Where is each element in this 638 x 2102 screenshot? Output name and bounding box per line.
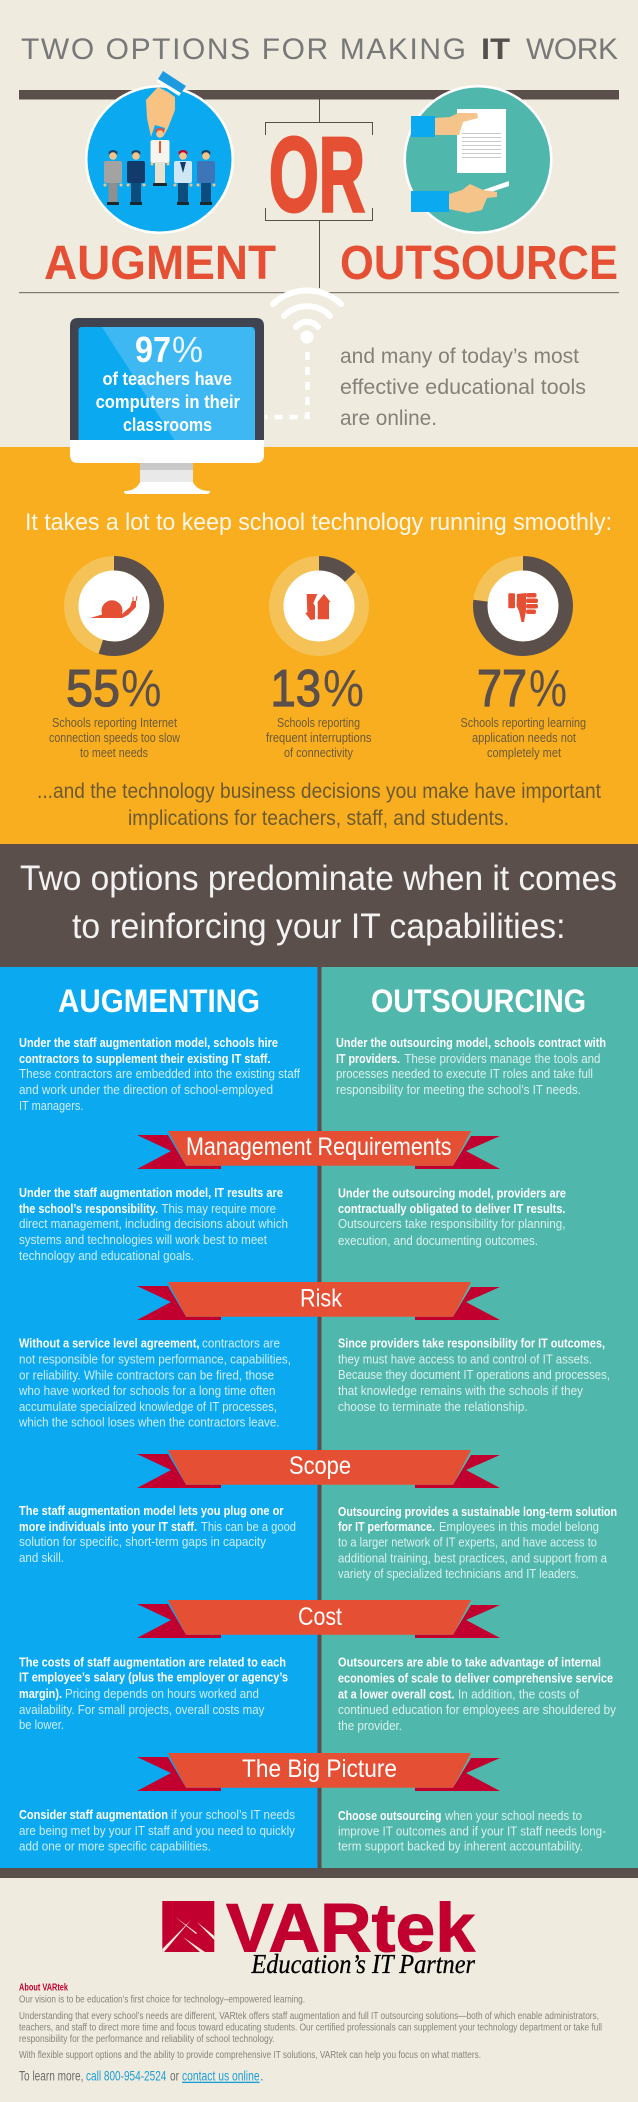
icon: broken arrows (305, 594, 331, 620)
text: augmenting risk: contractors are (202, 1336, 280, 1351)
text: effective tools online: and many of today’s most (340, 345, 579, 368)
banner: Scope (137, 1450, 500, 1488)
text: outsourcing model: responsibility for meeting the school’s IT needs. (336, 1082, 581, 1097)
icon: wifi signal with dashed connector (265, 290, 341, 417)
stat: 55% (66, 660, 162, 718)
text: business decisions implications (37, 779, 601, 830)
text: outsourcing management: contractually obligated to deliver IT results. (338, 1201, 566, 1216)
stat: 97% (135, 329, 203, 370)
stat: 13%: 13 (270, 660, 321, 718)
text: call to action: or (170, 2069, 179, 2084)
caption: learning applications: completely met (487, 746, 561, 760)
text: outsourcing model: IT providers. (336, 1051, 400, 1066)
banner: Scope: Scope (289, 1452, 351, 1480)
icon: hand picking a person (146, 71, 186, 137)
text: augmenting risk: which the school loses when the contractors leave. (18, 1415, 280, 1430)
text: outsourcing risk: they must have access to and control of IT assets. (338, 1352, 592, 1367)
text: outsourcing management: Under the outsourcing model, providers are (338, 1186, 566, 1200)
text: augmenting big picture: add one or more specific capabilities. (19, 1839, 211, 1854)
text: outsourcing cost: the provider. (338, 1718, 402, 1733)
icon: hand holding pen (411, 181, 509, 213)
text: business decisions implications: implications for teachers, staff, and students. (128, 806, 509, 830)
icon: hand holding document (411, 113, 478, 137)
caption: interruptions: frequent interruptions (266, 731, 372, 745)
text: outsourcing cost (338, 1655, 616, 1733)
text: augmenting big picture: Consider staff augmentation (19, 1807, 168, 1822)
caption: learning applications: application needs not (472, 731, 576, 745)
heading band: two options predominate: to reinforcing your IT capabilities: (72, 907, 566, 946)
text: outsourcing cost: at a lower overall cost. (338, 1686, 454, 1701)
text: augmenting scope (19, 1503, 296, 1565)
banner: The Big Picture (137, 1753, 500, 1791)
text: augmenting management: systems and technologies will work best to meet (19, 1232, 267, 1247)
text: outsourcing scope: additional training, best practices, and support from a (338, 1551, 608, 1566)
text: augmenting risk: or reliability. While contractors can be fired, those (19, 1368, 274, 1383)
text: outsourcing big picture (338, 1808, 606, 1854)
text: effective tools online: effective educational tools (340, 376, 586, 399)
text: outsourcing risk: choose to terminate the relationship. (338, 1399, 528, 1414)
heading: keep school technology running: It takes a lot to keep school technology running smoothly: (25, 509, 612, 536)
banner: Cost (137, 1600, 500, 1638)
text: outsourcing big picture: improve IT outcomes and if your IT staff needs long- (338, 1824, 606, 1839)
text: call to action: . (260, 2069, 264, 2084)
text: augmenting cost (19, 1655, 288, 1732)
logo: VARtek (162, 1890, 476, 1979)
text: augmenting risk: not responsible for system performance, capabilities, (19, 1352, 291, 1367)
banner: Risk: Risk (300, 1285, 342, 1313)
text: effective tools online (340, 345, 586, 430)
text: augmenting cost: Pricing depends on hours worked and (65, 1686, 259, 1701)
text: augmenting model: and work under the direction of school-employed (19, 1082, 273, 1097)
text: augmenting cost: The costs of staff augmentation are related to each (19, 1655, 286, 1670)
stat: 97%: 97 (135, 329, 171, 370)
text: outsourcing risk: that knowledge remains with the schools if they (338, 1383, 583, 1398)
text: outsourcing big picture: Choose outsourcing (338, 1808, 441, 1823)
text: augmenting management: Under the staff augmentation model, IT results are (19, 1185, 283, 1200)
text: augmenting risk: who have worked for schools for a long time often (18, 1383, 275, 1398)
caption: internet speeds: connection speeds too slow (49, 731, 181, 745)
text: augmenting cost: availability. For small projects, overall costs may (19, 1702, 265, 1717)
text: teachers have computers: computers in their (96, 392, 240, 412)
donut: 55 percent (71, 563, 157, 649)
icon: computer monitor with statistic (70, 318, 264, 494)
text: teachers have computers: of teachers have (102, 369, 232, 389)
text: augmenting scope: The staff augmentation model lets you plug one or (19, 1503, 284, 1518)
heading: OUTSOURCE: OUTSOURCE (340, 237, 618, 290)
text: augmenting model: contractors to supplement their existing IT staff. (19, 1051, 270, 1066)
text: teachers have computers: classrooms (123, 415, 212, 435)
text: augmenting model: These contractors are embedded into the existing staff (19, 1066, 300, 1081)
stat: 55%: % (121, 660, 162, 718)
text: effective tools online: are online. (340, 407, 437, 430)
text: call to action: call 800-954-2524 (86, 2069, 167, 2084)
text: outsourcing risk (338, 1336, 610, 1414)
text block: about VARtek: About VARtek (19, 1983, 68, 1994)
heading band: two options predominate (0, 844, 638, 967)
text block: about VARtek: Our vision is to be education’s first choice for technology–empowered learning. (19, 1995, 305, 2006)
text: outsourcing model: processes needed to execute IT roles and take full (336, 1066, 593, 1081)
panel: augmenting column background (0, 967, 318, 1868)
OR with bracket (266, 116, 372, 234)
text: augmenting management: This may require more (162, 1201, 276, 1216)
donut: 77 percent (480, 563, 566, 649)
text: outsourcing management (338, 1186, 566, 1248)
text: outsourcing scope: to a larger network of IT experts, and have access to (338, 1535, 597, 1550)
text: augmenting scope: more individuals into your IT staff. (19, 1519, 197, 1534)
title: WORK (526, 33, 618, 66)
icon: navy suited person (126, 150, 146, 205)
text: outsourcing model (336, 1035, 606, 1097)
text: outsourcing scope: variety of specialized technicians and IT leaders. (338, 1566, 579, 1581)
text: augmenting cost: be lower. (19, 1717, 64, 1732)
banner: Cost: Cost (298, 1603, 342, 1631)
caption: learning applications (460, 716, 586, 760)
text: outsourcing scope: for IT performance. (338, 1519, 435, 1534)
heading: AUGMENTING: AUGMENTING (58, 983, 260, 1019)
text: outsourcing scope (338, 1504, 617, 1581)
banner: Management Requirements (137, 1131, 500, 1169)
text: augmenting risk: Without a service level agreement, (19, 1336, 200, 1351)
stat: 13% (270, 660, 364, 718)
stat: 77%: % (529, 660, 567, 718)
text block: about VARtek: responsibility for the performance and reliability of school technology. (19, 2034, 275, 2045)
banner: Risk (137, 1282, 500, 1320)
stat: 55%: 55 (66, 660, 120, 718)
stat: 13%: % (323, 660, 364, 718)
text: call to action (19, 2069, 264, 2084)
banner: Management Requirements: Management Requirements (186, 1133, 452, 1161)
caption: interruptions: of connectivity (284, 746, 354, 760)
stat: 77%: 77 (477, 660, 527, 718)
banner: The Big Picture: The Big Picture (242, 1755, 397, 1783)
caption: internet speeds (49, 716, 181, 760)
OR with bracket: OR (269, 116, 365, 234)
text: outsourcing management: Outsourcers take responsibility for planning, (338, 1216, 566, 1231)
caption: interruptions: Schools reporting (277, 716, 360, 730)
logo: VARtek: Education’s IT Partner (250, 1949, 475, 1979)
text: augmenting model (19, 1035, 300, 1113)
title: IT (481, 33, 510, 66)
text: augmenting big picture: if your school’s IT needs (171, 1807, 295, 1822)
heading band: two options predominate: Two options predominate when it comes (20, 859, 617, 898)
stat: 77% (477, 660, 567, 718)
text block: about VARtek (19, 1983, 602, 2061)
text: augmenting scope: and skill. (19, 1550, 64, 1565)
text: call to action: To learn more, (19, 2069, 83, 2084)
icon: contract document (457, 109, 506, 173)
icon: white suited person lifted by hand (150, 128, 170, 186)
icon: logo square (162, 1901, 214, 1952)
text block: about VARtek: With flexible support options and the ability to provide comprehensive IT solutions, VARtek can help you focus on what matters. (19, 2050, 481, 2061)
heading: AUGMENT: AUGMENT (44, 237, 276, 290)
text: augmenting management (19, 1185, 288, 1263)
text: augmenting cost: IT employee’s salary (plus the employer or agency’s (19, 1670, 288, 1685)
text: augmenting model: Under the staff augmentation model, schools hire (19, 1035, 278, 1050)
text: augmenting cost: margin). (19, 1686, 62, 1701)
donut: 13 percent (276, 563, 362, 649)
icon: blue suited person (196, 150, 216, 205)
text: augmenting model: IT managers. (19, 1098, 83, 1113)
icon: gray suited person (104, 150, 122, 205)
title: TWO OPTIONS FOR MAKING (21, 33, 466, 66)
icon: light blue suited person (174, 150, 192, 205)
stat: 97%: % (172, 329, 203, 370)
heading: OUTSOURCING: OUTSOURCING (371, 983, 586, 1019)
text: augmenting scope: solution for specific, short-term gaps in capacity (19, 1534, 266, 1549)
text: augmenting big picture (19, 1807, 295, 1854)
caption: internet speeds: to meet needs (80, 746, 148, 760)
text: augmenting risk: accumulate specialized knowledge of IT processes, (19, 1399, 277, 1414)
text: outsourcing big picture: when your school needs to (444, 1808, 582, 1823)
panel: outsource illustration (404, 85, 552, 234)
logo: VARtek: VARtek (226, 1890, 476, 1967)
text: outsourcing big picture: term support backed by inherent accountability. (338, 1839, 583, 1854)
text: outsourcing scope: Employees in this model belong (439, 1519, 599, 1534)
text: outsourcing model: These providers manage the tools and (404, 1051, 600, 1066)
panel: outsourcing column background (322, 967, 638, 1868)
text: outsourcing management: execution, and documenting outcomes. (338, 1233, 538, 1248)
text: augmenting management: direct management, including decisions about which (19, 1216, 288, 1231)
text: call to action: contact us online (182, 2069, 260, 2084)
text: outsourcing cost: In addition, the costs of (458, 1686, 579, 1701)
text: augmenting big picture: are being met by your IT staff and you need to quickly (19, 1823, 295, 1838)
text: augmenting scope: This can be a good (201, 1519, 296, 1534)
panel: augment illustration (85, 71, 234, 234)
caption: learning applications: Schools reporting learning (460, 716, 586, 730)
text: augmenting management: the school’s responsibility. (19, 1201, 158, 1216)
icon: snail (90, 596, 137, 618)
caption: internet speeds: Schools reporting Internet (52, 716, 177, 730)
orange section background (0, 447, 638, 844)
icon: thumbs down (508, 593, 538, 622)
text: augmenting risk (18, 1336, 291, 1430)
text: teachers have computers (96, 369, 240, 435)
caption: interruptions (266, 716, 372, 760)
text: augmenting management: technology and educational goals. (19, 1248, 194, 1263)
